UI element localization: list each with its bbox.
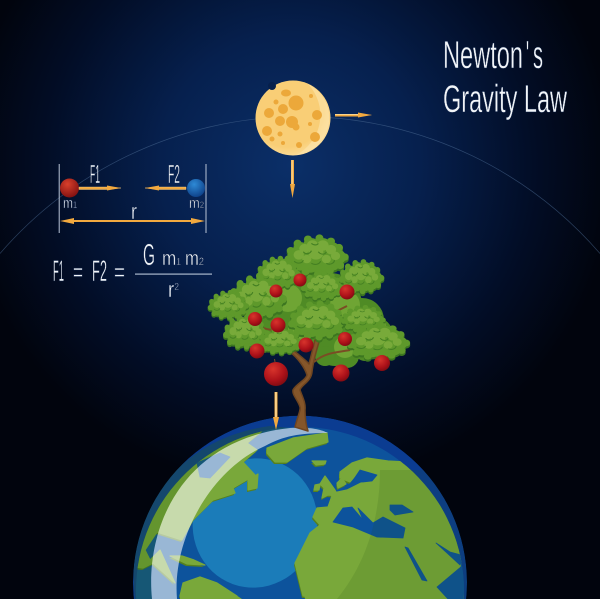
land shadows [134, 432, 469, 598]
diagram: two masses [59, 159, 207, 233]
bottom land fill [180, 596, 464, 599]
foliage clumps [208, 234, 410, 363]
apple [374, 355, 390, 371]
land and seas [134, 430, 470, 599]
formula: G [143, 237, 155, 272]
left tick [59, 164, 60, 233]
apple [250, 344, 264, 358]
arrow r [60, 218, 205, 224]
formula: = [114, 257, 125, 287]
arrow F2 head [145, 186, 159, 190]
rim shade on land [134, 426, 290, 599]
arrow F1 head [107, 186, 121, 190]
formula: F1 [53, 255, 64, 288]
earth [133, 416, 470, 599]
arrow: apple falling [273, 392, 279, 430]
canopy shade [274, 284, 386, 358]
apple [248, 312, 262, 326]
arrow F2 [145, 187, 186, 190]
label m1: m1 [63, 195, 77, 212]
right tick [206, 164, 207, 233]
canopy mass [259, 257, 393, 368]
diagram: two masses: F2 [168, 159, 180, 189]
moon [256, 80, 330, 156]
arrow: moon gravity [290, 160, 295, 198]
branches [256, 306, 350, 362]
trunk and branches [290, 340, 319, 431]
seas [197, 453, 470, 599]
apple [294, 274, 306, 286]
arrow F1 [79, 187, 121, 190]
title [443, 34, 567, 121]
apple [270, 318, 286, 332]
apple [270, 284, 282, 298]
right side shade [337, 470, 470, 599]
red mass [60, 178, 79, 198]
formula: F2 [92, 255, 107, 288]
falling apple [264, 359, 288, 386]
apple [298, 338, 314, 352]
orbit arc [0, 117, 600, 254]
diagram: two masses: F1 [90, 159, 100, 189]
title: s [533, 34, 543, 77]
blue mass [187, 179, 205, 197]
formula: m1 [162, 248, 181, 270]
title: ' [526, 34, 529, 77]
continents [135, 430, 470, 596]
label m2: m2 [189, 195, 204, 212]
formula: r [168, 277, 175, 302]
earth outer rim [133, 416, 467, 599]
formula: = [73, 257, 83, 287]
apple [340, 284, 354, 300]
light crescent highlight [151, 428, 328, 599]
formula: m2 [185, 248, 204, 270]
formula [53, 237, 212, 302]
tree [208, 234, 410, 431]
apple [332, 364, 350, 382]
arrow: moon orbital velocity [335, 112, 372, 118]
formula: 2 [174, 282, 179, 293]
ocean [136, 427, 464, 599]
apple [338, 332, 352, 346]
lit ocean patch [192, 458, 318, 588]
label r: r [131, 199, 137, 224]
title: Newton [443, 34, 523, 77]
